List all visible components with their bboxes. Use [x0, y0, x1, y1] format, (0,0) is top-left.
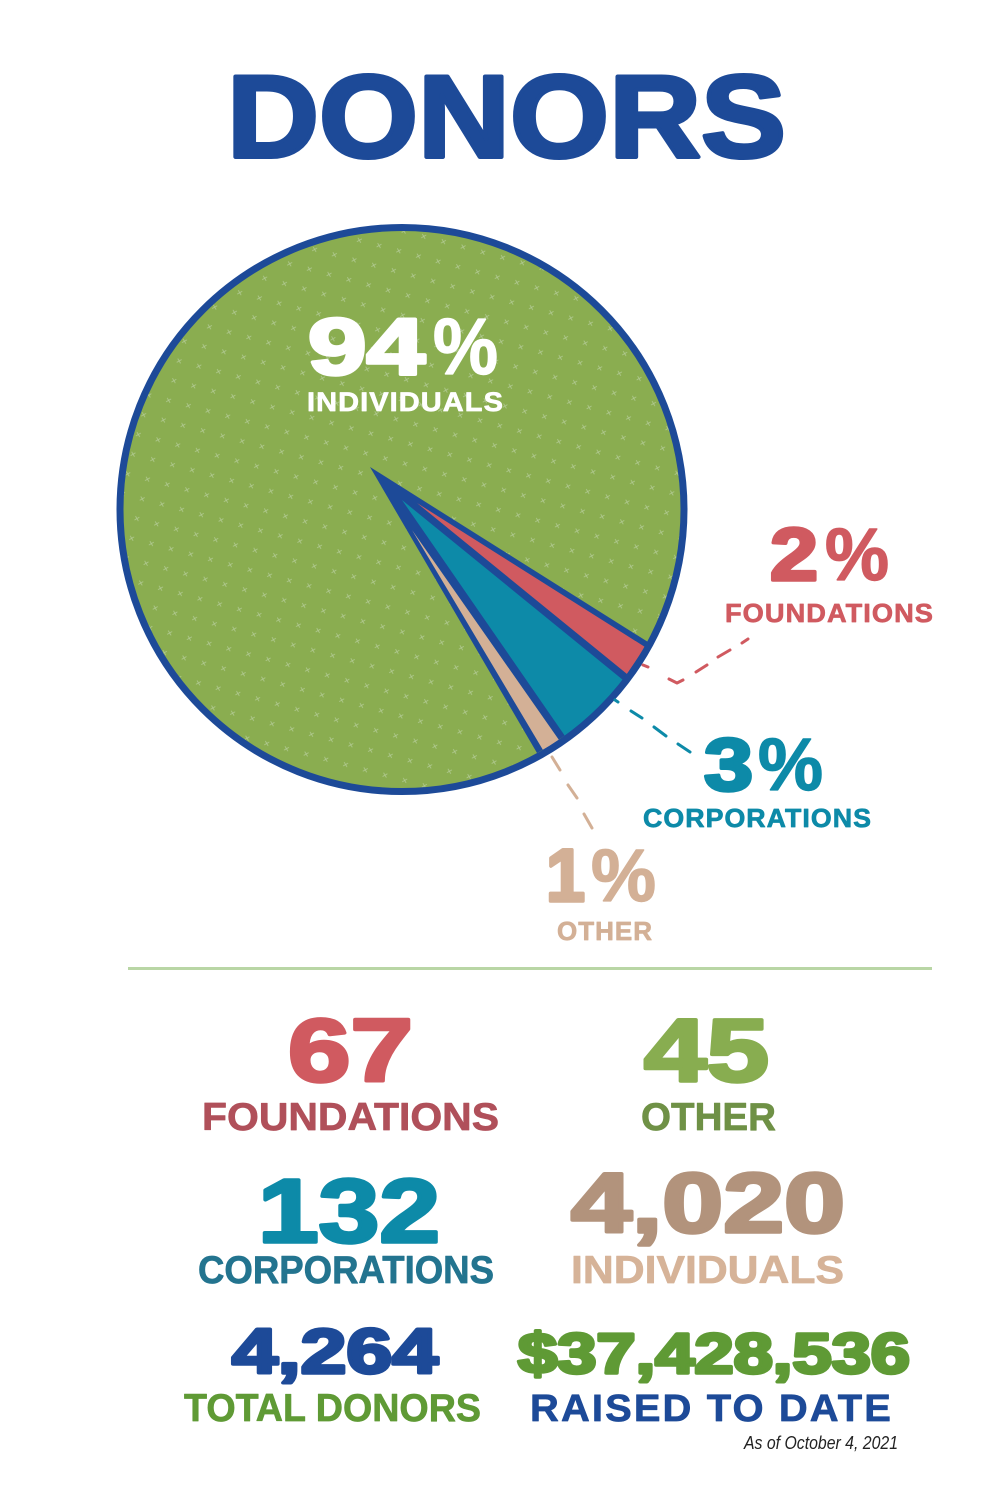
stat: amount raised to date	[518, 1322, 910, 1430]
stat: 67 foundations: FOUNDATIONS	[202, 1096, 499, 1139]
stat: 4,020 individuals	[571, 1156, 845, 1292]
title: DONORS	[227, 51, 786, 182]
callout: 2% foundations	[725, 513, 934, 628]
stat: 45 other: OTHER	[641, 1096, 776, 1139]
callout: 3% corporations: 3	[704, 723, 753, 806]
callout: 94% individuals: %	[433, 302, 498, 391]
stat: amount raised to date: $37,428,536	[518, 1322, 910, 1386]
leader line: foundations	[643, 639, 748, 683]
callout: 2% foundations: 2	[770, 513, 818, 596]
callout: 3% corporations: CORPORATIONS	[643, 803, 872, 833]
pie slice: individuals 94%	[120, 228, 684, 792]
pie slice: corporations 3%	[402, 500, 623, 736]
stat: 45 other	[641, 1000, 776, 1139]
pie outer ring	[120, 228, 684, 792]
callout: 2% foundations: %	[825, 513, 889, 596]
stat: 4,264 total donors: TOTAL DONORS	[184, 1387, 481, 1430]
callout: 2% foundations: FOUNDATIONS	[725, 598, 934, 628]
pie slice: foundations 2%	[417, 503, 645, 674]
stat: 4,020 individuals: INDIVIDUALS	[571, 1249, 844, 1292]
callout: 1% other	[546, 834, 656, 946]
stat: 132 corporations: 132	[258, 1162, 440, 1262]
pie chart	[120, 228, 684, 792]
callout: 94% individuals: 94	[308, 302, 426, 391]
leader line: corporations	[615, 700, 690, 752]
callout: 1% other: 1	[546, 834, 585, 917]
stat: 132 corporations: CORPORATIONS	[198, 1249, 494, 1292]
pie slice: other 1%	[412, 530, 559, 750]
callout: 94% individuals: INDIVIDUALS	[307, 387, 504, 417]
stat: 67 foundations	[202, 1000, 499, 1139]
stat: 4,264 total donors: 4,264	[232, 1317, 438, 1387]
footnote: date: As of October 4, 2021	[743, 1433, 898, 1453]
callout: 1% other: OTHER	[557, 916, 653, 946]
stat: 132 corporations	[198, 1162, 494, 1292]
leader line: other	[552, 757, 592, 828]
callout: 3% corporations: %	[758, 723, 823, 806]
callout: 1% other: %	[591, 834, 656, 917]
divider	[128, 967, 932, 970]
callout: 3% corporations	[643, 723, 872, 833]
stat: 4,020 individuals: 4,020	[571, 1156, 845, 1250]
stat: 4,264 total donors	[184, 1317, 481, 1430]
stat: 67 foundations: 67	[288, 1000, 413, 1100]
stat: 45 other: 45	[644, 1000, 769, 1100]
stat: amount raised to date: RAISED TO DATE	[530, 1388, 893, 1430]
pie slice outlines	[370, 467, 648, 753]
callout: 94% individuals	[307, 302, 504, 417]
